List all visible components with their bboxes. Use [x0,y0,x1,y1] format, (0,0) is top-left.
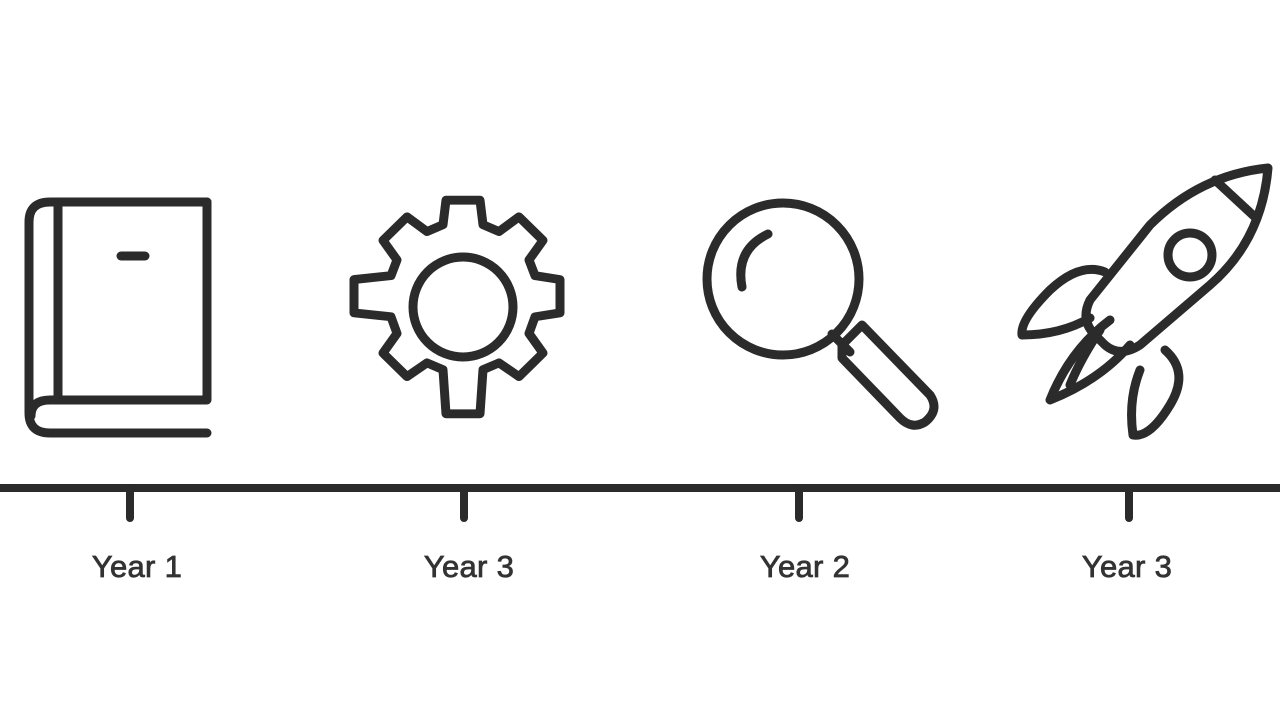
label: Year 3 (second): Year 3 [424,549,514,584]
icon: rocket [1022,168,1268,435]
timeline axis [0,488,1280,518]
icon: gear [354,200,560,414]
label: Year 3: Year 3 [1082,549,1172,584]
label: Year 2: Year 2 [760,549,850,584]
label: Year 1: Year 1 [92,549,182,584]
icon: magnifier [707,203,934,425]
icon: book [29,202,207,433]
